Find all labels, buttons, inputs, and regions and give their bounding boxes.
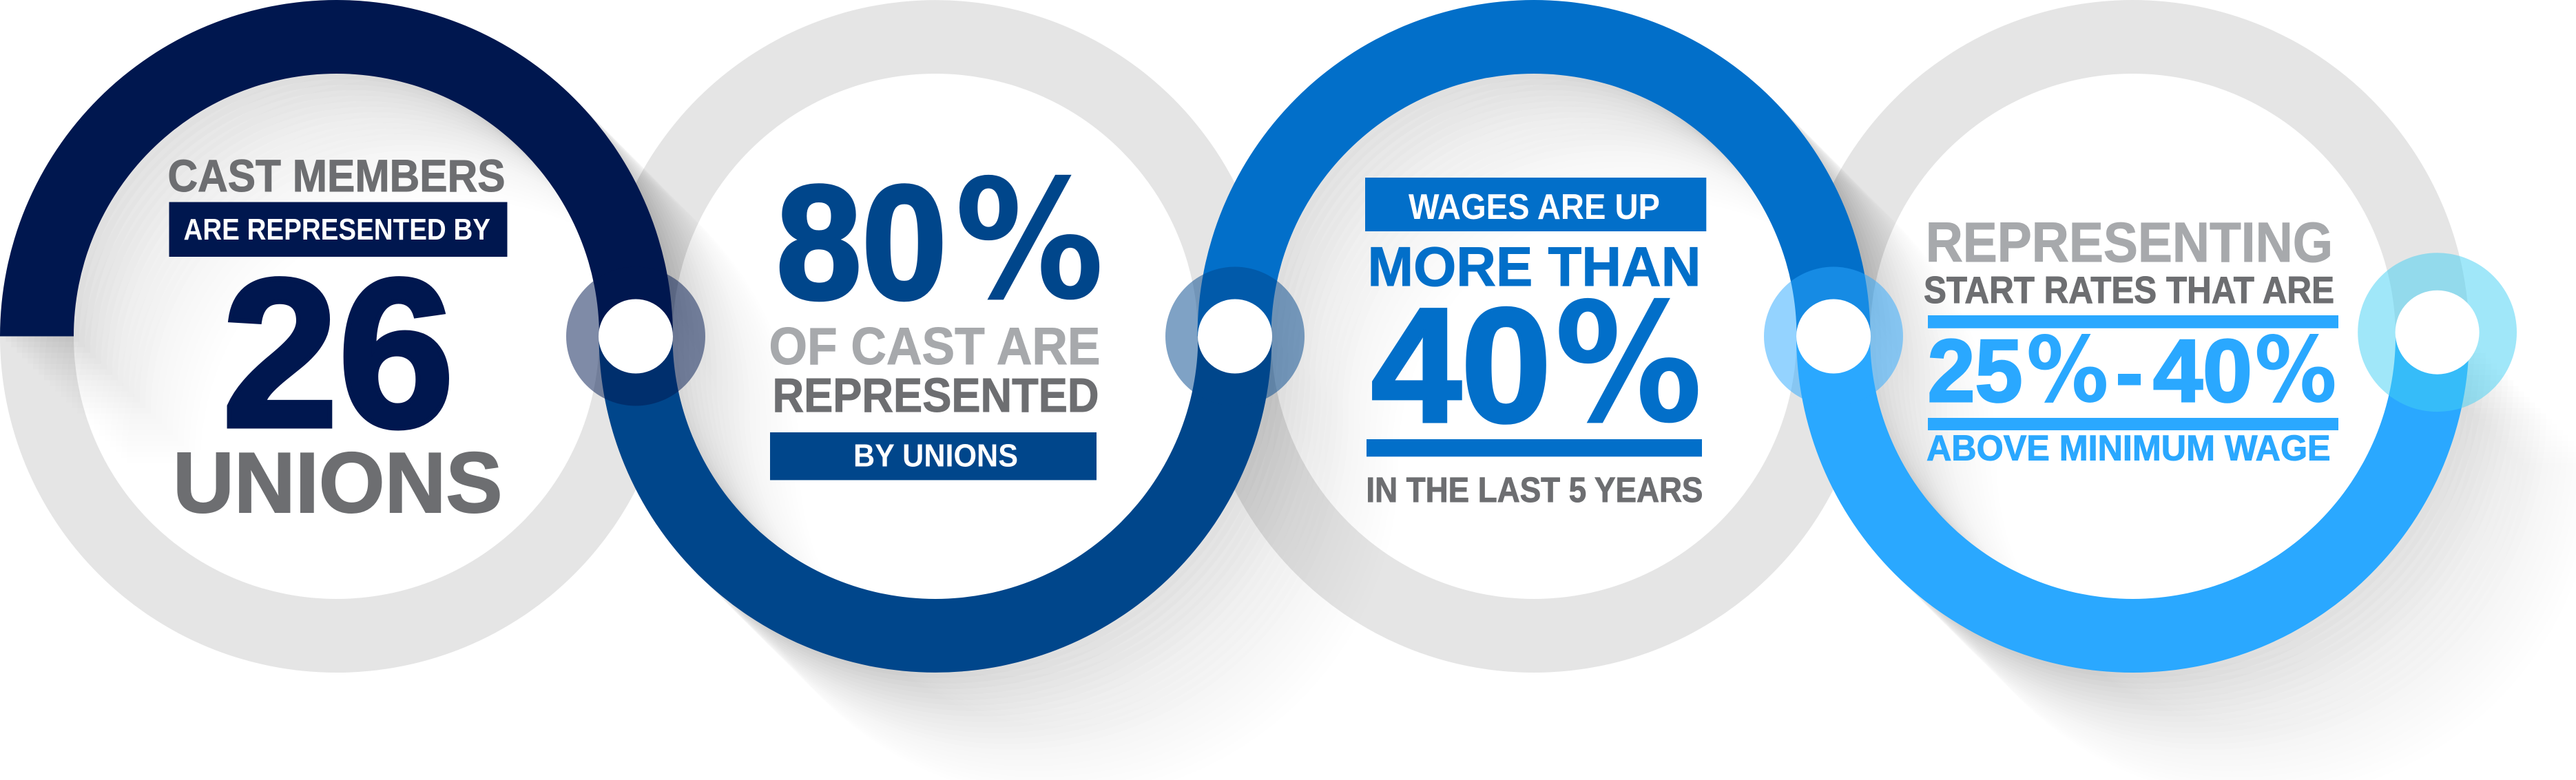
big number: 25%-40%: % xyxy=(2254,317,2337,423)
big number: 80%: % xyxy=(955,144,1104,337)
panel: 80 percent text xyxy=(769,144,1104,480)
arc: mid blue top half of circle 3 xyxy=(1197,0,1871,336)
panel: 26 unions text xyxy=(168,150,507,531)
text: in the last 5 years: IN THE LAST 5 YEARS xyxy=(1366,470,1703,509)
banner: are represented by xyxy=(169,202,507,257)
rule below range xyxy=(1928,418,2338,430)
banner: by unions: BY UNIONS xyxy=(853,438,1018,474)
connector node 1 xyxy=(566,267,705,406)
arc: light blue bottom half of circle 4 xyxy=(1796,336,2469,673)
arc: navy top half of circle 1 xyxy=(0,0,673,336)
heading: cast members: CAST MEMBERS xyxy=(168,150,506,201)
big number: 25%-40% xyxy=(1927,317,2337,423)
big number: 26: 26 xyxy=(222,235,455,472)
arc: dark blue bottom half of circle 2 xyxy=(599,336,1271,673)
big number: 80% xyxy=(776,144,1104,337)
banner: wages are up: WAGES ARE UP xyxy=(1409,187,1660,227)
connector node 4 xyxy=(2358,253,2517,412)
banner: by unions xyxy=(770,432,1097,480)
big number: 80%: 80 xyxy=(776,152,947,334)
text: of cast are: OF CAST ARE xyxy=(769,317,1101,376)
big number: 40%: 40 xyxy=(1371,275,1551,456)
text: above minimum wage: ABOVE MINIMUM WAGE xyxy=(1926,428,2331,468)
text: start rates that are: START RATES THAT ARE xyxy=(1924,268,2334,311)
connector node 2 xyxy=(1165,267,1305,406)
banner: wages are up xyxy=(1365,178,1706,231)
rule above range xyxy=(1928,315,2338,328)
big number: 40% xyxy=(1371,267,1703,460)
heading: representing: REPRESENTING xyxy=(1926,211,2333,274)
text: represented: REPRESENTED xyxy=(773,368,1099,422)
big number: 25%-40%: 40 xyxy=(2153,322,2252,421)
panel: wages text xyxy=(1365,178,1706,509)
big number: 40%: % xyxy=(1554,267,1703,460)
rule under 40% xyxy=(1367,439,1702,456)
text: more than: MORE THAN xyxy=(1368,236,1701,298)
big number: 25%-40%: 25 xyxy=(1927,322,2022,421)
connector node 3 xyxy=(1764,267,1903,406)
label: unions: UNIONS xyxy=(173,436,503,531)
banner: are represented by: ARE REPRESENTED BY xyxy=(183,213,490,246)
panel: start rates text xyxy=(1924,211,2338,468)
big number: 25%-40%: % xyxy=(2026,317,2109,423)
